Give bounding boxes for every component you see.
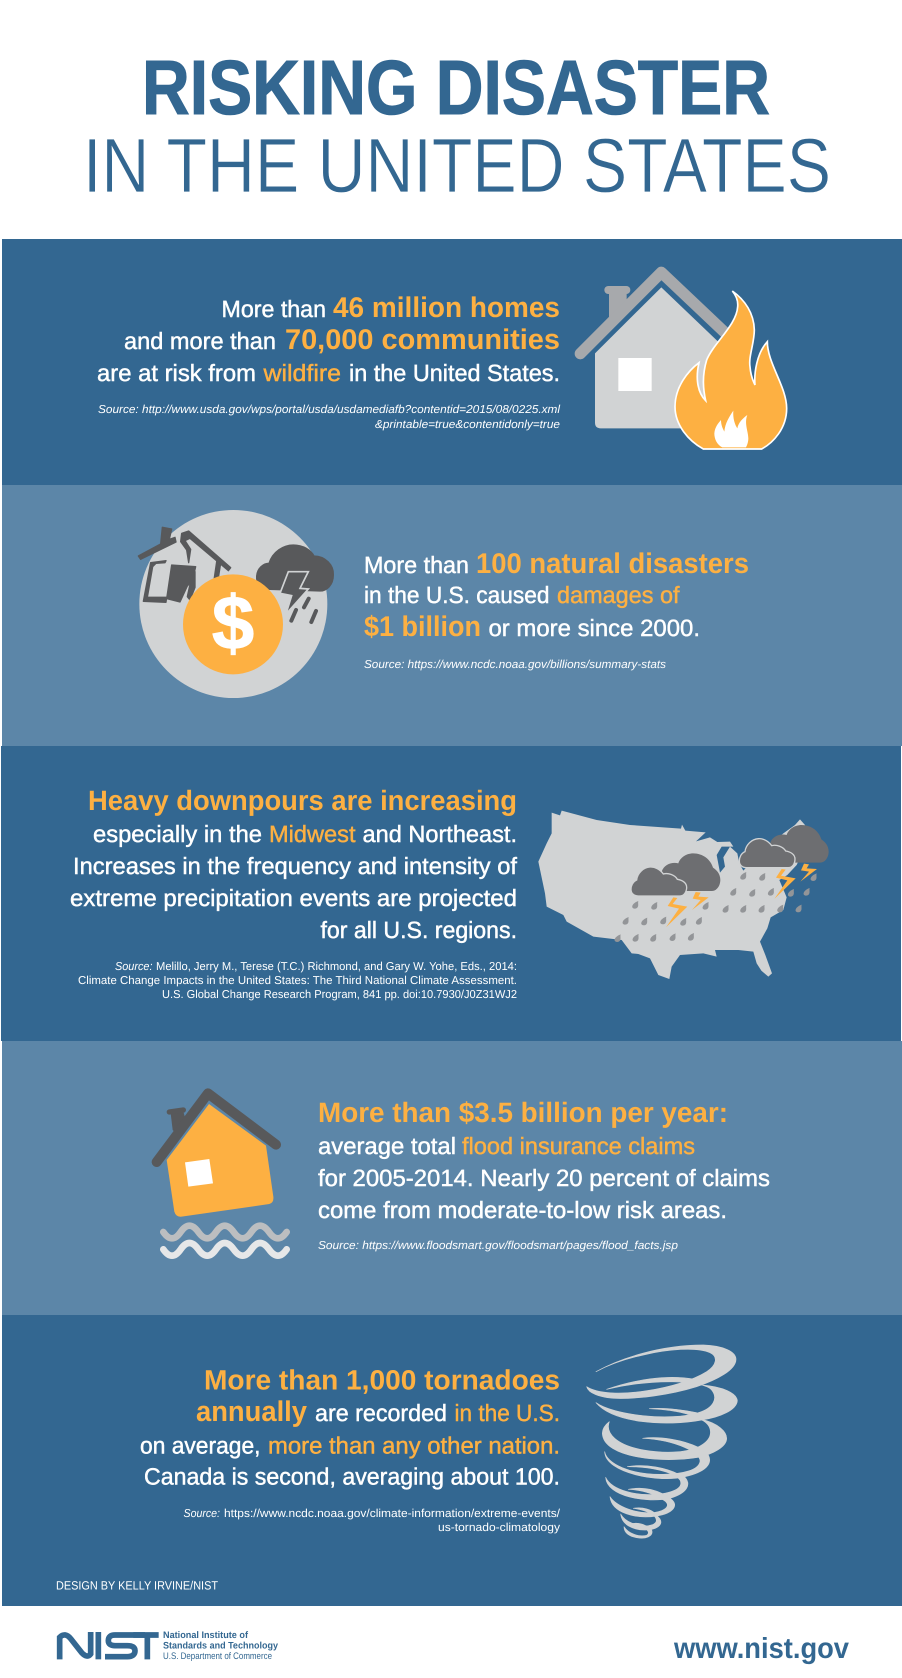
text block: heavy downpours: especially in the — [93, 821, 262, 847]
icon: disaster damages: $ — [212, 581, 254, 665]
text block: billion-dollar disasters: 100 natural disasters — [476, 548, 749, 580]
title: RISKING DISASTER — [142, 45, 770, 131]
text block: flood claims: More than $3.5 billion per year: — [318, 1097, 728, 1128]
source: billion-dollar disasters: Source: https://www.ncdc.noaa.gov/billions/summary-stats — [364, 659, 666, 671]
icon: US map with storms — [538, 811, 829, 979]
text block: billion-dollar disasters: or more since 2000. — [488, 615, 700, 641]
panel: heavy downpours — [1, 746, 901, 1041]
icon: disaster damages — [138, 510, 333, 698]
NIST logo: National Institute of — [163, 1630, 249, 1641]
panel: wildfire — [2, 239, 902, 485]
panel: natural disasters — [2, 485, 902, 746]
text block: wildfire statistic: 46 million homes — [333, 292, 560, 324]
source: wildfire: Source: http://www.usda.gov/wps/portal/usda/usdamediafb?contentid=2015/08/0225.xml — [98, 404, 560, 416]
text block: tornadoes: more than any other nation. — [268, 1432, 560, 1458]
text block: billion-dollar disasters: in the U.S. caused — [364, 582, 550, 608]
text block: tornadoes: are recorded — [315, 1400, 447, 1426]
source: flood claims: Source: https://www.floodsmart.gov/floodsmart/pages/flood_facts.jsp — [318, 1240, 679, 1252]
text block: wildfire statistic: are at risk from — [97, 360, 256, 386]
source: national climate assessment: Climate Change Impacts in the United States: The Third National Climate Assessment. — [78, 975, 517, 987]
credit: DESIGN BY KELLY IRVINE/NIST — [56, 1578, 219, 1592]
text block: heavy downpours — [70, 785, 517, 943]
title — [83, 45, 831, 209]
text block: billion-dollar disasters: damages of — [557, 582, 680, 608]
text block: wildfire statistic: 70,000 communities — [285, 324, 560, 356]
text block: wildfire statistic — [97, 292, 560, 386]
NIST logo — [60, 1630, 279, 1662]
source: wildfire: &printable=true&contentidonly=true — [375, 419, 560, 431]
text block: heavy downpours: and Northeast. — [362, 821, 517, 847]
NIST logo: Standards and Technology — [163, 1640, 279, 1652]
text block: flood claims: flood insurance claims — [462, 1133, 695, 1159]
text block: flood claims: come from moderate-to-low risk areas. — [318, 1197, 727, 1223]
source: national climate assessment — [78, 961, 517, 1001]
source: national climate assessment: Source: — [115, 961, 152, 973]
text block: heavy downpours: Midwest — [269, 821, 356, 847]
text block: wildfire statistic: in the United States. — [349, 360, 560, 386]
text block: heavy downpours: Heavy downpours are increasing — [88, 785, 517, 816]
text block: wildfire statistic: More than — [222, 296, 326, 322]
source: tornadoes: Source: — [184, 1508, 220, 1520]
panel: tornadoes — [2, 1315, 902, 1606]
text block: billion-dollar disasters: $1 billion — [364, 611, 481, 643]
text block: wildfire statistic: wildfire — [262, 360, 341, 386]
text block: flood claims — [318, 1097, 770, 1223]
text block: tornadoes: on average, — [140, 1432, 260, 1458]
icon: tornado — [587, 1345, 737, 1538]
icon: flooded house — [157, 1093, 287, 1256]
NIST logo: U.S. Department of Commerce — [163, 1651, 272, 1662]
text block: tornadoes: annually — [196, 1396, 307, 1428]
text block: billion-dollar disasters: More than — [364, 552, 469, 578]
source: tornadoes: https://www.ncdc.noaa.gov/climate-information/extreme-events/ — [224, 1508, 561, 1520]
source: national climate assessment: Melillo, Jerry M., Terese (T.C.) Richmond, and Gary W. Yohe, Eds., 2014: — [156, 961, 517, 973]
text block: wildfire statistic: and more than — [124, 328, 276, 354]
source: national climate assessment: U.S. Global Change Research Program, 841 pp. doi:10.7930/J0Z31WJ2 — [162, 989, 517, 1001]
icon: house on fire — [580, 272, 787, 449]
text block: heavy downpours: Increases in the frequency and intensity of — [73, 853, 517, 879]
source: wildfire — [98, 404, 560, 431]
source: tornadoes — [184, 1508, 561, 1534]
text block: flood claims: average total — [318, 1133, 456, 1159]
text block: billion-dollar disasters — [364, 548, 749, 643]
text block: tornadoes: Canada is second, averaging about 100. — [144, 1464, 560, 1490]
panel: flood insurance — [2, 1041, 902, 1315]
website: www.nist.gov — [673, 1633, 849, 1665]
text block: tornadoes: in the U.S. — [454, 1400, 560, 1426]
source: tornadoes: us-tornado-climatology — [438, 1522, 560, 1534]
text block: heavy downpours: for all U.S. regions. — [320, 917, 517, 943]
text block: tornadoes: More than 1,000 tornadoes — [204, 1364, 560, 1396]
text block: tornadoes — [140, 1364, 560, 1490]
text block: heavy downpours: extreme precipitation events are projected — [70, 885, 517, 911]
text block: flood claims: for 2005-2014. Nearly 20 percent of claims — [318, 1165, 770, 1191]
